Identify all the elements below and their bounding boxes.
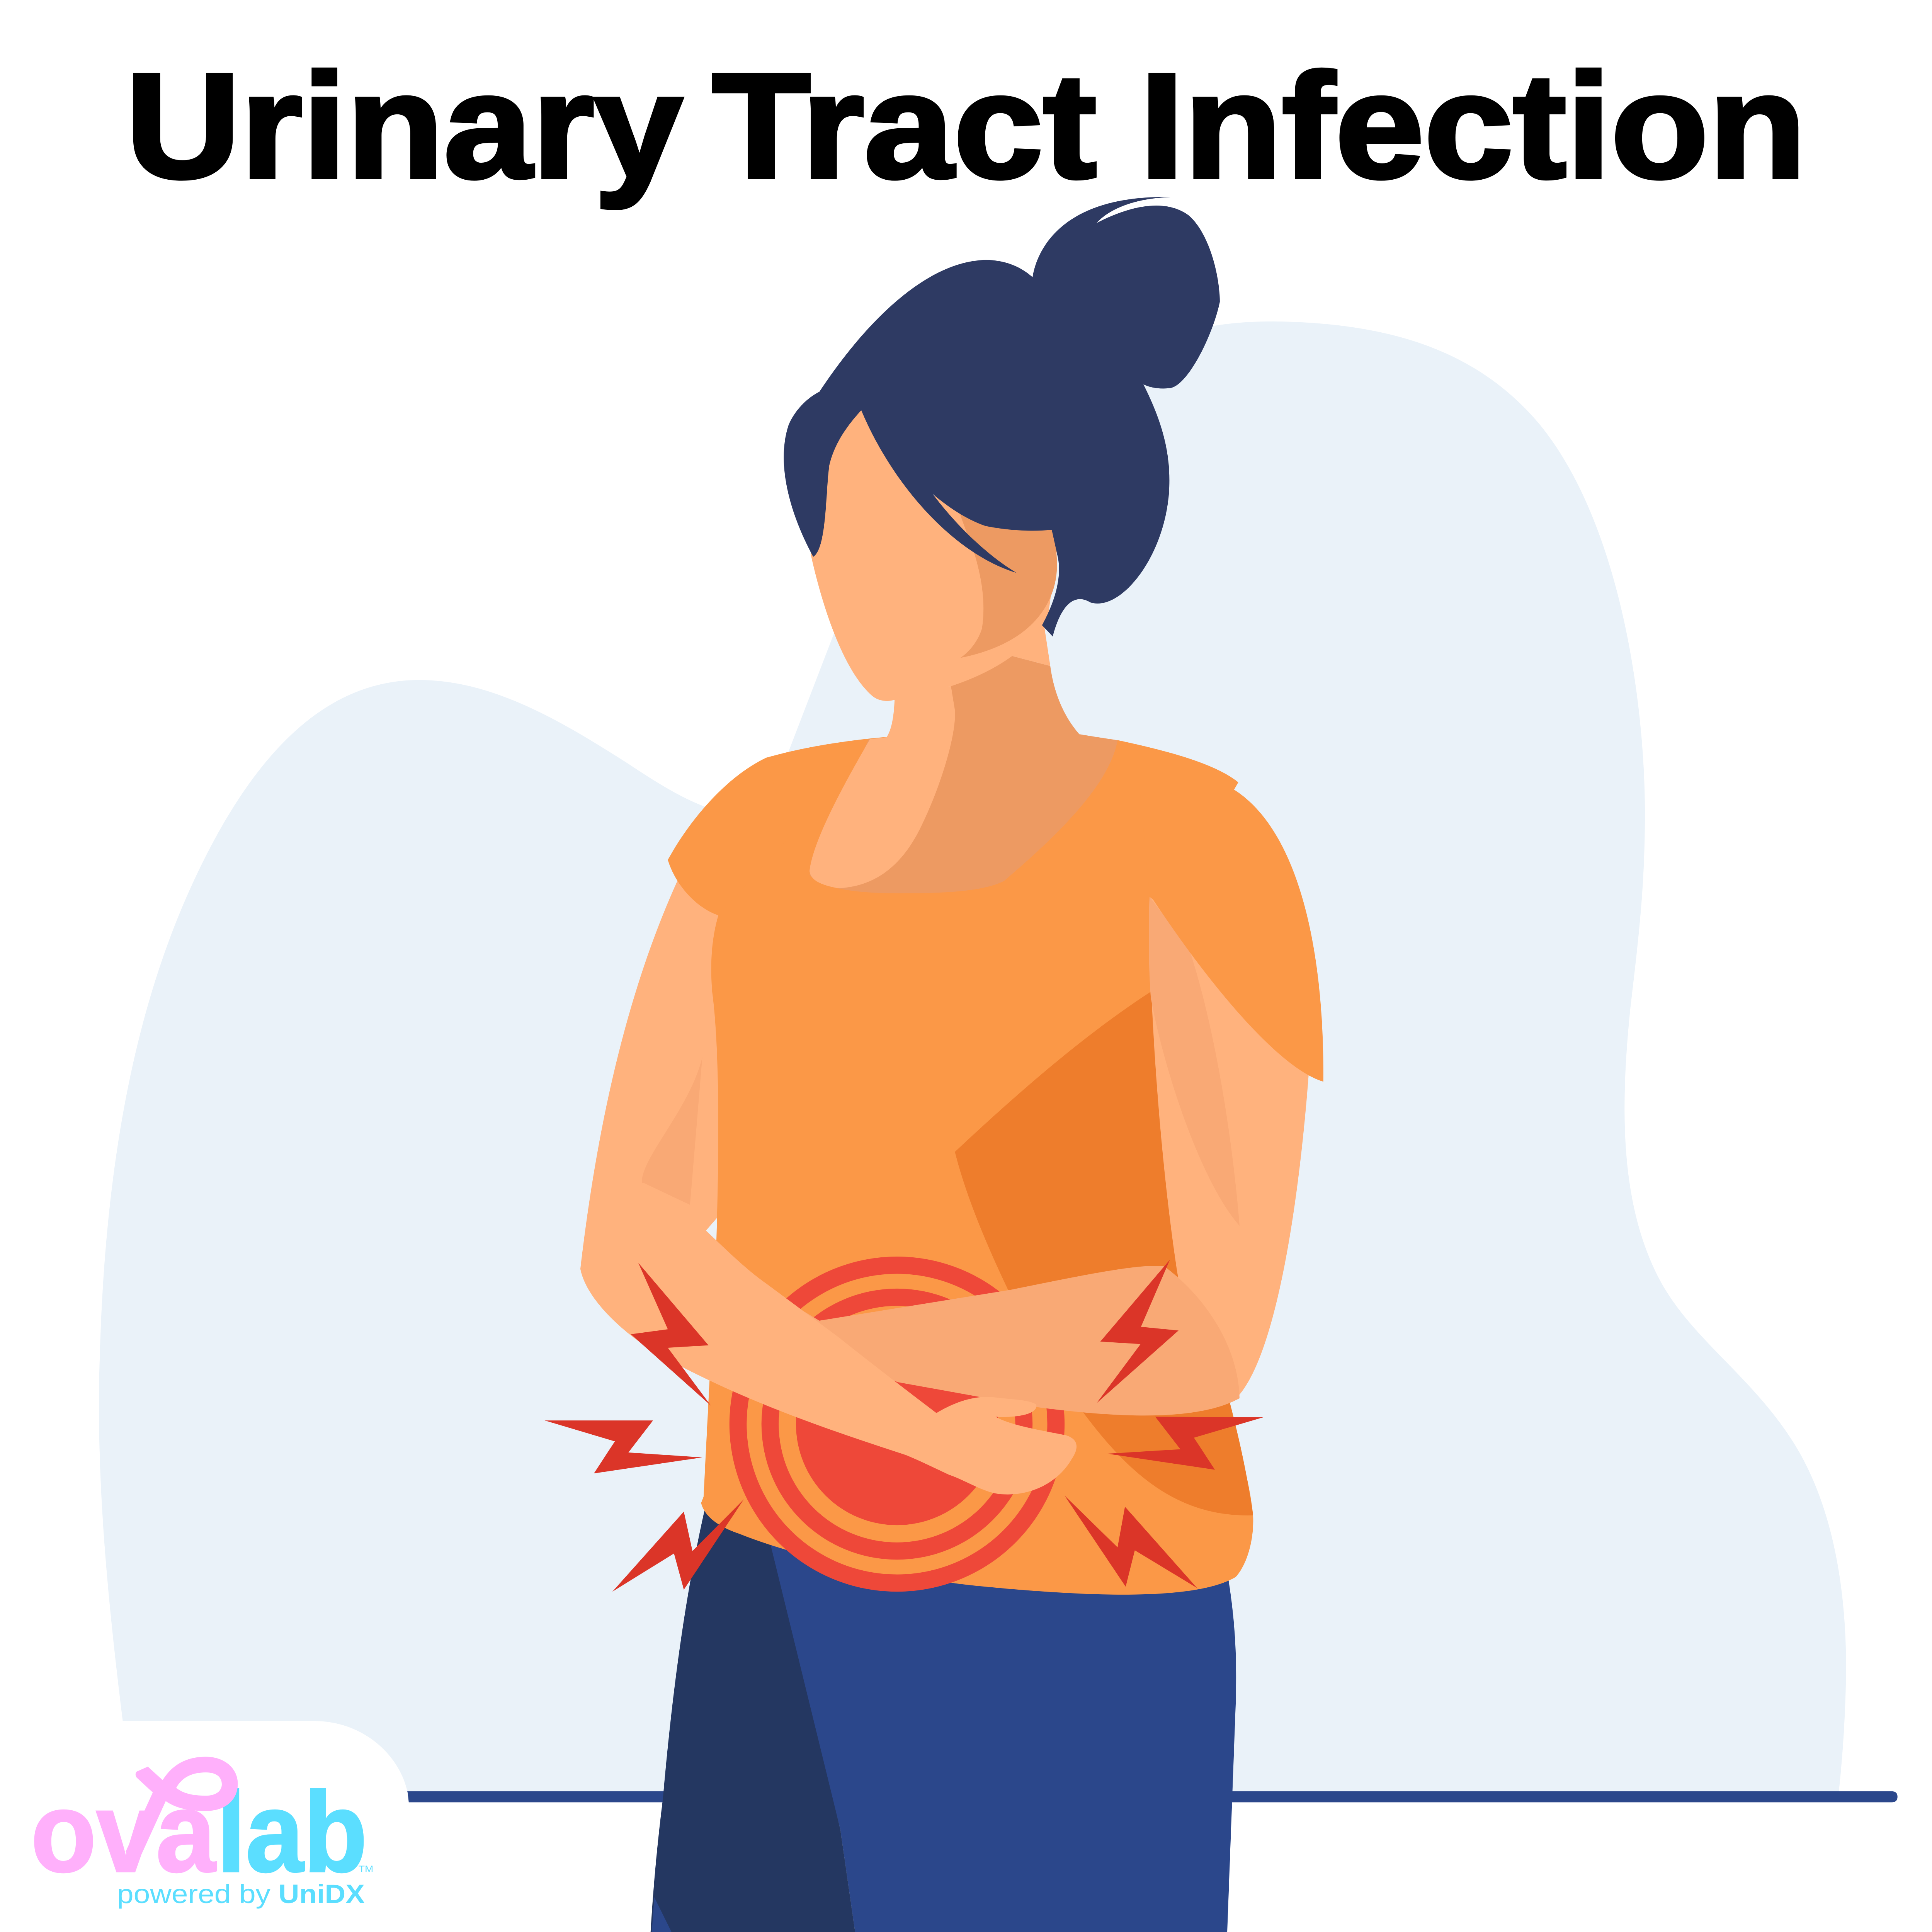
forearm front and hand	[616, 1183, 1077, 1495]
bolt lower right	[1065, 1496, 1197, 1588]
hair	[784, 197, 1220, 636]
face shadow	[960, 514, 1057, 658]
trademark: TM	[359, 1864, 373, 1874]
shirt shading	[955, 992, 1253, 1515]
bolt right	[1107, 1417, 1264, 1470]
title: Infection	[1140, 43, 1806, 209]
logo word lab: lab	[217, 1769, 367, 1896]
neck shadow	[810, 656, 1117, 893]
trousers	[651, 1509, 1236, 1932]
shirt sleeve left	[668, 758, 789, 915]
bolt left	[544, 1420, 702, 1473]
neck	[810, 686, 955, 888]
bolt lower left	[612, 1499, 744, 1592]
bolt upper left	[631, 1263, 711, 1406]
upper arm, viewer's left	[580, 872, 727, 1343]
ground line	[394, 1791, 1898, 1802]
UniDX: UniDX	[279, 1879, 365, 1909]
logo word ova: ova	[31, 1769, 216, 1896]
logo: ovalab	[31, 1757, 373, 1909]
upper arm, viewer's right	[1149, 897, 1310, 1402]
shirt torso	[690, 734, 1253, 1595]
pain target	[730, 1257, 1065, 1592]
title: Urinary	[126, 43, 684, 210]
face	[811, 406, 1060, 701]
background blob	[99, 321, 1846, 1796]
chin shadow band	[912, 622, 1050, 690]
forearm behind	[764, 1266, 1240, 1415]
figure: woman holding abdomen	[544, 197, 1323, 1932]
shirt sleeve right	[1140, 788, 1323, 1082]
title: Tract	[712, 43, 1097, 209]
bolt upper right	[1097, 1260, 1179, 1403]
logo backdrop	[0, 1721, 410, 1932]
logo ribbon	[126, 1757, 238, 1870]
powered by: powered by	[117, 1879, 271, 1909]
title	[126, 43, 1806, 210]
pain bolts	[544, 1260, 1264, 1592]
